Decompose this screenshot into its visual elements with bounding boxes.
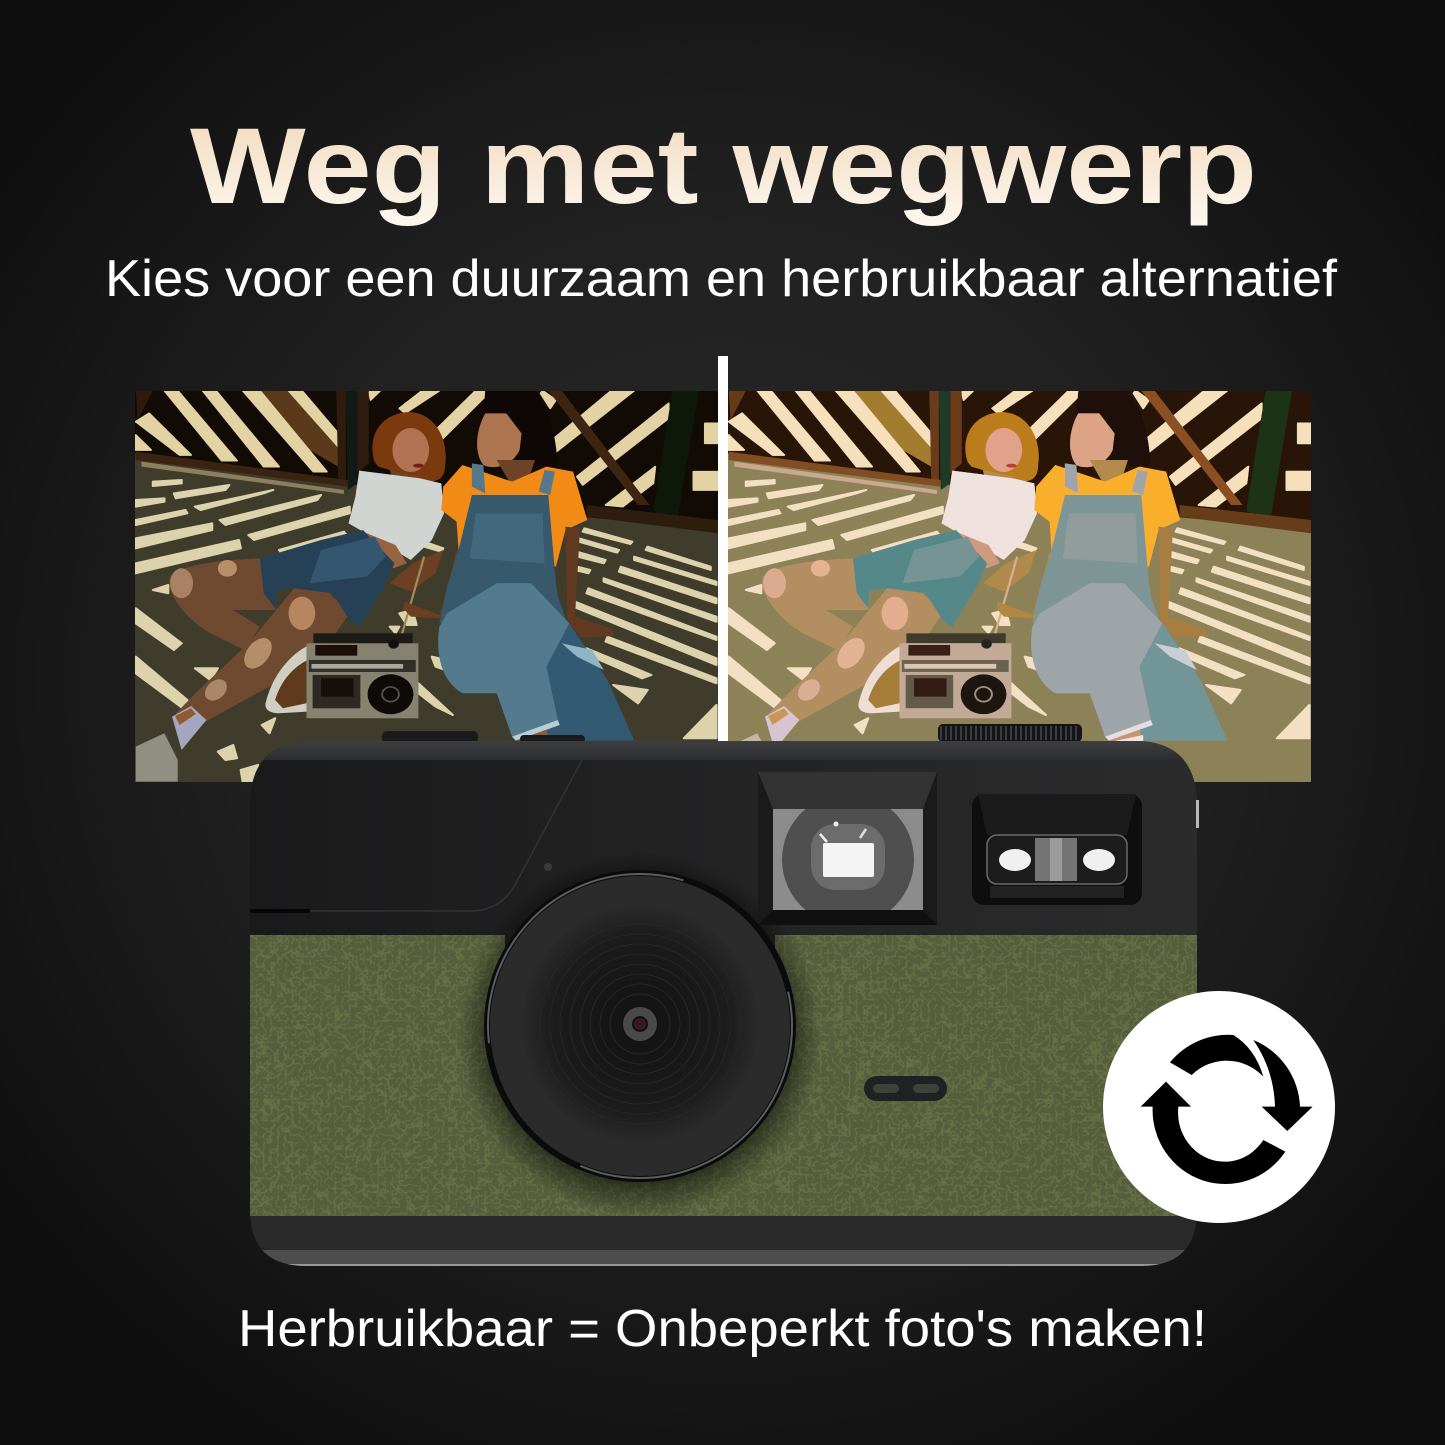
recycling arrows — [1141, 1035, 1313, 1184]
title: Weg met wegwerp — [190, 105, 1257, 226]
viewfinder — [758, 772, 937, 925]
leather covering — [250, 935, 1197, 1216]
subtitle: Kies voor een duurzaam en herbruikbaar alternatief — [105, 250, 1338, 308]
seam dark accent — [250, 909, 310, 913]
flash window — [972, 794, 1142, 905]
camera top dials — [382, 724, 1082, 743]
lens shadow — [458, 852, 822, 1216]
camera top strip — [250, 741, 1197, 760]
side button — [1196, 800, 1199, 828]
lens — [484, 870, 796, 1182]
shutter slot — [864, 1076, 947, 1101]
camera bottom strip — [250, 1216, 1197, 1266]
photo: after (bright) — [727, 390, 1313, 783]
body seam line — [252, 760, 582, 911]
camera body — [250, 741, 1197, 1266]
body notch above lens — [505, 930, 775, 960]
divider between photos — [718, 356, 728, 741]
camera — [250, 724, 1199, 1266]
small sensor dot — [544, 863, 552, 871]
photo: before (dark) — [134, 390, 720, 783]
white badge — [1103, 991, 1335, 1223]
reuse icon — [1103, 991, 1335, 1223]
caption: Herbruikbaar = Onbeperkt foto's maken! — [238, 1300, 1207, 1358]
